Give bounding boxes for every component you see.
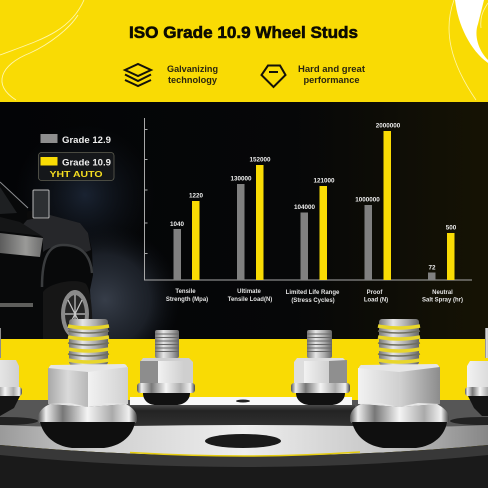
background: yellow header: [0, 0, 488, 102]
icon: stacked layers: [125, 64, 151, 86]
group: tensile strength: Strength (Mpa): [166, 297, 208, 303]
wheel nut: small right: [291, 330, 350, 405]
base: [296, 393, 345, 405]
decorative white curves: left: [0, 0, 84, 100]
feature: galvanizing technology: [125, 64, 218, 86]
text: galvanizing technology: Galvanizing: [167, 64, 218, 75]
hex head: [140, 358, 193, 384]
plate rear surface: [0, 400, 488, 430]
plate top surface: [0, 425, 488, 456]
legend: grade 10.9 with brand box: YHT AUTO: [50, 170, 102, 179]
group: tensile strength: 1220: [189, 192, 203, 200]
group: ultimate tensile load: 130000: [230, 176, 252, 182]
group: limited life range: 121000: [313, 178, 335, 184]
chart axes: [144, 118, 472, 280]
legend: [38, 134, 114, 180]
group: tensile strength: [166, 192, 208, 303]
truck body: [0, 182, 93, 340]
legend: grade 12.9: Grade 12.9: [62, 135, 111, 145]
plate hole: [205, 434, 281, 448]
group: neutral salt spray: 500: [446, 224, 457, 232]
group: neutral salt spray: [422, 224, 463, 304]
flange: [137, 383, 195, 393]
bar chart: [144, 118, 472, 304]
black base: [40, 422, 135, 448]
threaded stud: [379, 319, 419, 365]
wheel nut: far left: [0, 328, 22, 416]
chrome flange: [38, 404, 137, 423]
group: proof load: [355, 122, 401, 304]
truck photo: [0, 182, 93, 340]
group: neutral salt spray: 72: [428, 264, 436, 272]
legend: grade 10.9 with brand box: Grade 10.9: [62, 158, 111, 168]
group: proof load: Load (N): [364, 298, 388, 304]
text: hard and great performance: Hard and great: [298, 64, 366, 75]
small hole: [236, 400, 250, 402]
panel: dark comparison band: [0, 102, 488, 340]
threaded stud: [69, 319, 108, 365]
truck wheel: [43, 281, 92, 340]
black base: [352, 422, 447, 448]
title: ISO Grade 10.9 Wheel Studs: [129, 23, 358, 42]
flange: [291, 383, 350, 393]
hex head: [48, 364, 128, 407]
wheel nut: far right: [465, 328, 488, 416]
yellow lower band: [0, 339, 488, 399]
legend: grade 10.9 with brand box: [38, 152, 114, 180]
plate lower edge: [0, 445, 488, 488]
group: neutral salt spray: Salt Spray (hr): [422, 298, 463, 304]
wheel spacer plate: [0, 397, 488, 488]
chrome flange: [350, 404, 449, 423]
base: [143, 393, 190, 405]
group: proof load: 1000000: [355, 196, 380, 204]
group: limited life range: 104000: [294, 204, 316, 211]
group: limited life range: (Stress Cycles): [291, 298, 335, 304]
wheel stud: large right: [350, 319, 449, 448]
wheel stud: large left: [38, 319, 137, 448]
group: limited life range: Limited Life Range: [286, 290, 340, 296]
decorative white shape: top right: [449, 0, 488, 100]
text: hard and great performance: performance: [304, 75, 360, 86]
hex head: [294, 358, 347, 384]
wheel nut: small left: [137, 330, 195, 405]
group: ultimate tensile load: 152000: [249, 156, 271, 164]
icon: gem shield: [262, 66, 286, 87]
stud: [307, 330, 332, 358]
group: proof load: 2000000: [376, 122, 401, 130]
text: galvanizing technology: technology: [168, 75, 218, 86]
group: limited life range: [286, 178, 340, 304]
feature: hard and great performance: [262, 64, 366, 87]
hex head: [358, 364, 440, 407]
group: ultimate tensile load: [228, 156, 272, 303]
group: ultimate tensile load: Tensile Load(N): [228, 297, 272, 303]
side holes: [0, 417, 38, 425]
truck mirror: [27, 190, 49, 219]
group: tensile strength: Tensile: [175, 289, 196, 295]
plate rear edge: [130, 405, 355, 428]
group: proof load: Proof: [367, 290, 383, 296]
group: tensile strength: 1040: [170, 221, 184, 228]
stud: [155, 330, 179, 358]
group: neutral salt spray: Neutral: [432, 290, 453, 296]
yellow plate trim: [130, 452, 360, 456]
group: ultimate tensile load: Ultimate: [237, 289, 261, 295]
